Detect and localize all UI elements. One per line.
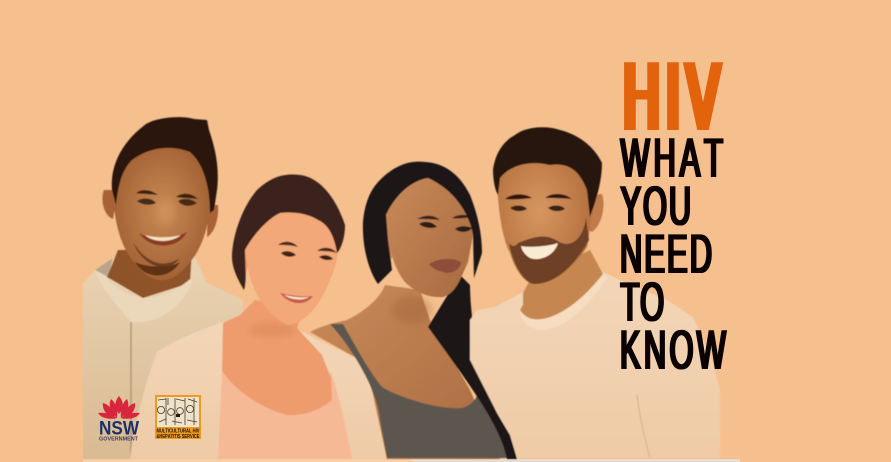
people photo group [83,117,720,459]
waratah flower [98,396,140,419]
GOVERNMENT wordmark: GOVERNMENT [99,436,138,442]
NSW wordmark: NSW [99,418,139,440]
person 1: man in collared shirt [83,117,243,459]
bottom edge strip [83,459,740,462]
heading line: YOU: YOU [620,176,693,237]
person 2: woman in cream cardigan [130,174,386,459]
heading line: WHAT: WHAT [620,128,727,189]
heading line: TO: TO [620,272,665,333]
icon: Multicultural HIV Hepatitis Service logo [155,395,201,440]
person 4: man in white t-shirt [470,127,720,458]
heading: HIV: HIV [624,44,726,150]
title [620,44,729,381]
heading line: NEED: NEED [620,224,714,285]
heading line: KNOW: KNOW [620,320,729,381]
icon: NSW Government logo [98,396,140,442]
heading lines: what you need to know [620,128,729,381]
logo caption line 2: &HEPATITIS SERVICE [156,434,200,440]
logo caption line 1: MULTICULTURAL HIV [156,429,200,435]
person 3: woman in grey tank top [310,162,517,459]
sketched faces [157,398,197,425]
